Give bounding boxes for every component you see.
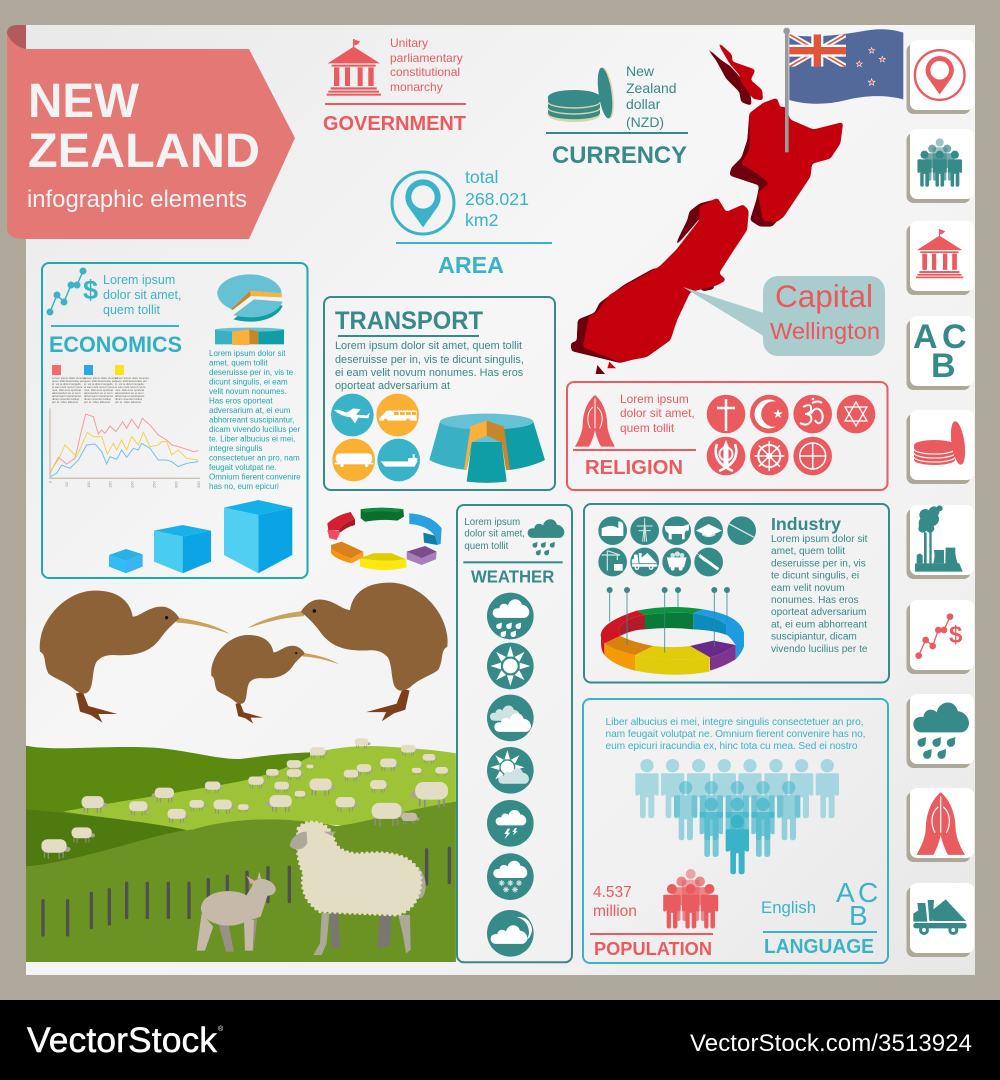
kiwi birds [40,583,448,723]
fence [41,847,451,937]
icon: ship [377,439,420,481]
heading: weather: WEATHER [471,567,554,586]
legend: Lorem ipsum dolor sit amet [115,376,149,380]
icon: dump truck [630,548,659,576]
legend: quem tollit deseruisse per [52,379,84,383]
legend: ei eam velit novum nonu [52,385,83,389]
population intro text: nam feugait volutpat ne. Omnium fierent convenire has no, [606,729,866,740]
3D cube bars [109,500,292,573]
legend: abhorreant suscipiantur, [115,394,145,398]
icon: location pin [392,172,454,234]
economics body text: deseruisse per in, vis te [209,368,294,377]
government description: Unitary [390,36,428,50]
industry body text: nonumes. Has eros [771,595,859,606]
card: location [906,40,974,114]
transport body text: deseruisse per in, vis te dicunt singulis, [335,354,524,366]
religion text: Lorem ipsum [620,392,689,406]
heading: language: LANGUAGE [764,936,874,958]
industry icons [598,516,756,576]
transport body text: Lorem ipsum dolor sit amet, quem tollit [335,340,522,352]
government description: parliamentary [390,51,463,65]
flat pie slice bar [215,328,284,345]
economics body text: consectetuer an pro, nam [209,454,300,462]
legend: dicam vivendo lucilius [52,397,80,401]
currency block [546,63,688,169]
legend: in, vis te dicunt singulis, [52,382,82,386]
legend: quem tollit deseruisse per [84,379,116,383]
footer band: VectorStock [27,1020,217,1060]
economics body text: adversarium at, ei eum [209,406,291,415]
card: religion [906,788,974,862]
icon: moon and cloud [487,910,534,957]
industry body text: Lorem ipsum dolor sit [771,534,868,545]
card: language: C [942,318,967,356]
card: weather [906,694,974,768]
icon: sun [487,643,534,689]
panel: religion [567,382,888,490]
transport body text: oporteat adversarium at [335,380,450,392]
icon: plane [331,394,374,436]
icon: graduation cap [694,516,723,545]
weather intro text: quem tollit [464,541,509,552]
icon: snow [487,853,534,900]
card: language [906,316,974,390]
religious symbols [707,395,875,475]
line chart: 100 [86,481,91,488]
population intro text: eum epicuri iracundia ex, hinc tota cu mea. Sed ei nostro [606,741,858,752]
icon: cross [707,395,745,433]
icon: sun behind cloud [487,747,534,794]
legend: in, vis te dicunt singulis, [115,382,145,386]
heading: transport: TRANSPORT [335,307,483,335]
icon: coins [548,66,617,122]
card: industry [906,505,974,579]
weather intro text: dolor sit amet, [464,529,525,540]
lamb [197,872,278,952]
icon: rain [487,593,534,639]
kiwi right [248,583,448,721]
weather intro text: Lorem ipsum [464,517,520,528]
legend: adversarium at, ei eum [52,391,81,395]
religion text: dolor sit amet, [620,406,695,420]
economics intro text: quem tollit [103,303,160,317]
economics body text: Has eros oporteat [209,396,273,406]
icon: bus [376,394,419,436]
heading: industry: Industry [771,514,841,534]
transport icons [331,394,420,481]
economics body text: Omnium fierent convenire [209,472,301,482]
icon: om [793,395,832,433]
legend: quem tollit deseruisse per [115,379,147,383]
icon: letters ABC: A [836,877,855,908]
icon: stadium [598,516,627,545]
icon: letters ABC [836,877,878,931]
cut cone chart [429,414,545,483]
icon: star of David [837,395,875,433]
icon: rain cloud [528,519,564,555]
sidebar icon cards [906,40,974,957]
legend: dicam vivendo lucilius [115,397,143,401]
legend: per te. Liber albucius [84,400,111,404]
line chart: 0 [48,480,53,483]
icon: sun cross [793,437,832,475]
line chart: 300 [174,481,179,488]
industry body text: at, ei eum abhorreant [771,619,867,630]
icon: praying hands [575,395,615,447]
industry body text: te dicunt singulis, ei [771,571,859,582]
economics intro text: dolor sit amet, [103,288,182,302]
card: people [906,129,974,203]
population value: million [593,903,637,920]
title banner: NEW [28,75,140,128]
card: economics [906,600,974,674]
icon: letters ABC: B [849,900,868,931]
icon: cloudy [487,695,534,741]
industry body text: suscipiantur, dicam [771,632,857,643]
heading: religion: RELIGION [585,457,683,479]
economics body text: dicam vivendo lucilius per [209,425,300,434]
economics intro text: Lorem ipsum [103,273,175,287]
legend: mes. Has eros oporteat [52,388,81,392]
icon: needle [727,516,756,545]
icon: khanda [707,437,745,475]
icon: tanker [332,439,375,481]
economics body text: Lorem ipsum dolor sit [209,349,286,358]
icon: thunderstorm [487,800,534,847]
population intro text [606,717,866,752]
icon: crescent and star [750,395,789,433]
economics body text: feugait volutpat ne. [209,463,277,472]
heading: area: AREA [438,252,504,278]
legend: mes. Has eros oporteat [84,388,113,392]
icon: power pylon [630,516,659,545]
line chart: 200 [129,481,134,488]
currency description: Zealand [626,80,677,96]
map: Stewart Island [596,362,616,374]
legend: adversarium at, ei eum [84,391,113,395]
legend: abhorreant suscipiantur, [52,394,82,398]
panel: population and language [583,699,888,963]
card: language: B [931,347,956,385]
title banner: ZEALAND [28,124,260,178]
icon: syringe [694,548,723,576]
icon: rising trend with dollar [46,268,98,316]
callout: capital: Wellington [770,318,880,344]
icon: mine cart [662,548,691,576]
title banner [7,25,295,239]
area value: total [465,167,498,187]
card: currency [906,410,974,484]
card: economics: $ [949,621,962,648]
footer band: ® [218,1025,224,1033]
map of New Zealand [571,42,843,374]
map: shadow [571,47,780,362]
transport body text: ei eam velit novum nonumes. Has eros [335,367,524,379]
icon: letters ABC: C [858,877,878,908]
callout: capital [683,276,885,356]
economics body text: te. Liber albucius ei mei, [209,434,295,444]
broken ring chart [327,508,442,570]
title banner: infographic elements [27,186,247,213]
population intro text: Liber albucius ei mei, integre singulis consectetuer an pro, [606,717,864,728]
area block [392,167,552,278]
economics body text: velit novum nonumes. [209,387,287,396]
map: islands [583,42,843,362]
industry body text: vivendo lucilius per te [771,644,868,655]
icon: rising trend with dollar: $ [83,275,98,305]
economics body text: integre singulis [209,444,262,453]
legend: mes. Has eros oporteat [115,388,144,392]
religion text: quem tollit [620,421,675,435]
population value: 4.537 [593,884,632,901]
kiwi left [40,591,230,723]
icon: dharma wheel [750,437,789,475]
government description: monarchy [390,80,443,94]
heading: population: POPULATION [594,939,712,959]
economics body text: abhorreant suscipiantur, [209,416,294,424]
pie chart [217,274,283,322]
industry body text: deseruisse per in, vis [771,558,866,569]
industry body text: oporteat adversarium [771,607,866,618]
legend: ei eam velit novum nonu [84,385,115,389]
flock of small sheep [41,738,450,859]
industry body text: amet, quem tollit [771,546,845,557]
industry body text: eam velit novum [771,583,844,594]
ewe [290,822,426,955]
area value: km2 [465,210,498,230]
area value: 268.021 [465,189,529,209]
icon: crowd [663,869,718,928]
flag of New Zealand [783,28,903,152]
legend [52,365,149,404]
legend: Lorem ipsum dolor sit amet [52,376,86,380]
economics body text: amet, quem tollit [209,358,268,368]
footer band [0,1000,1000,1080]
legend: Lorem ipsum dolor sit amet [84,376,118,380]
icon: crane [598,548,627,576]
icon: parliament building [327,39,381,96]
panel: economics [42,263,308,578]
government block [323,36,466,135]
heading: economics: ECONOMICS [49,332,182,357]
callout: capital: Capital [775,278,873,314]
government description: constitutional [390,65,460,79]
ring chart with pins [601,587,744,675]
language value: English [761,898,816,917]
line chart: 50 [64,481,69,487]
heading: currency: CURRENCY [552,142,687,169]
legend: dicam vivendo lucilius [84,397,112,401]
card: language: A [913,318,938,356]
line chart: 350 [196,481,201,488]
card: government [906,221,974,295]
heading: government: GOVERNMENT [323,113,466,135]
legend: per te. Liber albucius [52,400,79,404]
economics body text: has no, eum epicuri [209,482,279,491]
panel: industry [584,504,889,682]
icon: cow [662,516,691,545]
kiwi centre [211,635,339,723]
panel: weather [457,505,572,962]
legend: abhorreant suscipiantur, [84,394,114,398]
currency description: (NZD) [626,114,664,130]
legend: ei eam velit novum nonu [115,385,146,389]
economics body text: dicunt singulis, ei eam [209,378,288,386]
currency description: dollar [626,96,661,112]
legend: in, vis te dicunt singulis, [84,382,114,386]
line chart [48,408,201,488]
line chart: 150 [108,481,113,488]
legend: per te. Liber albucius [115,400,142,404]
landscape with sheep [26,738,456,962]
people pictogram [635,759,839,874]
line chart: 250 [152,481,157,488]
footer band: VectorStock.com/3513924 [690,1030,972,1057]
currency description: New [626,63,655,79]
card: mining truck [906,883,974,957]
legend: adversarium at, ei eum [115,391,144,395]
panel: transport [324,297,555,490]
